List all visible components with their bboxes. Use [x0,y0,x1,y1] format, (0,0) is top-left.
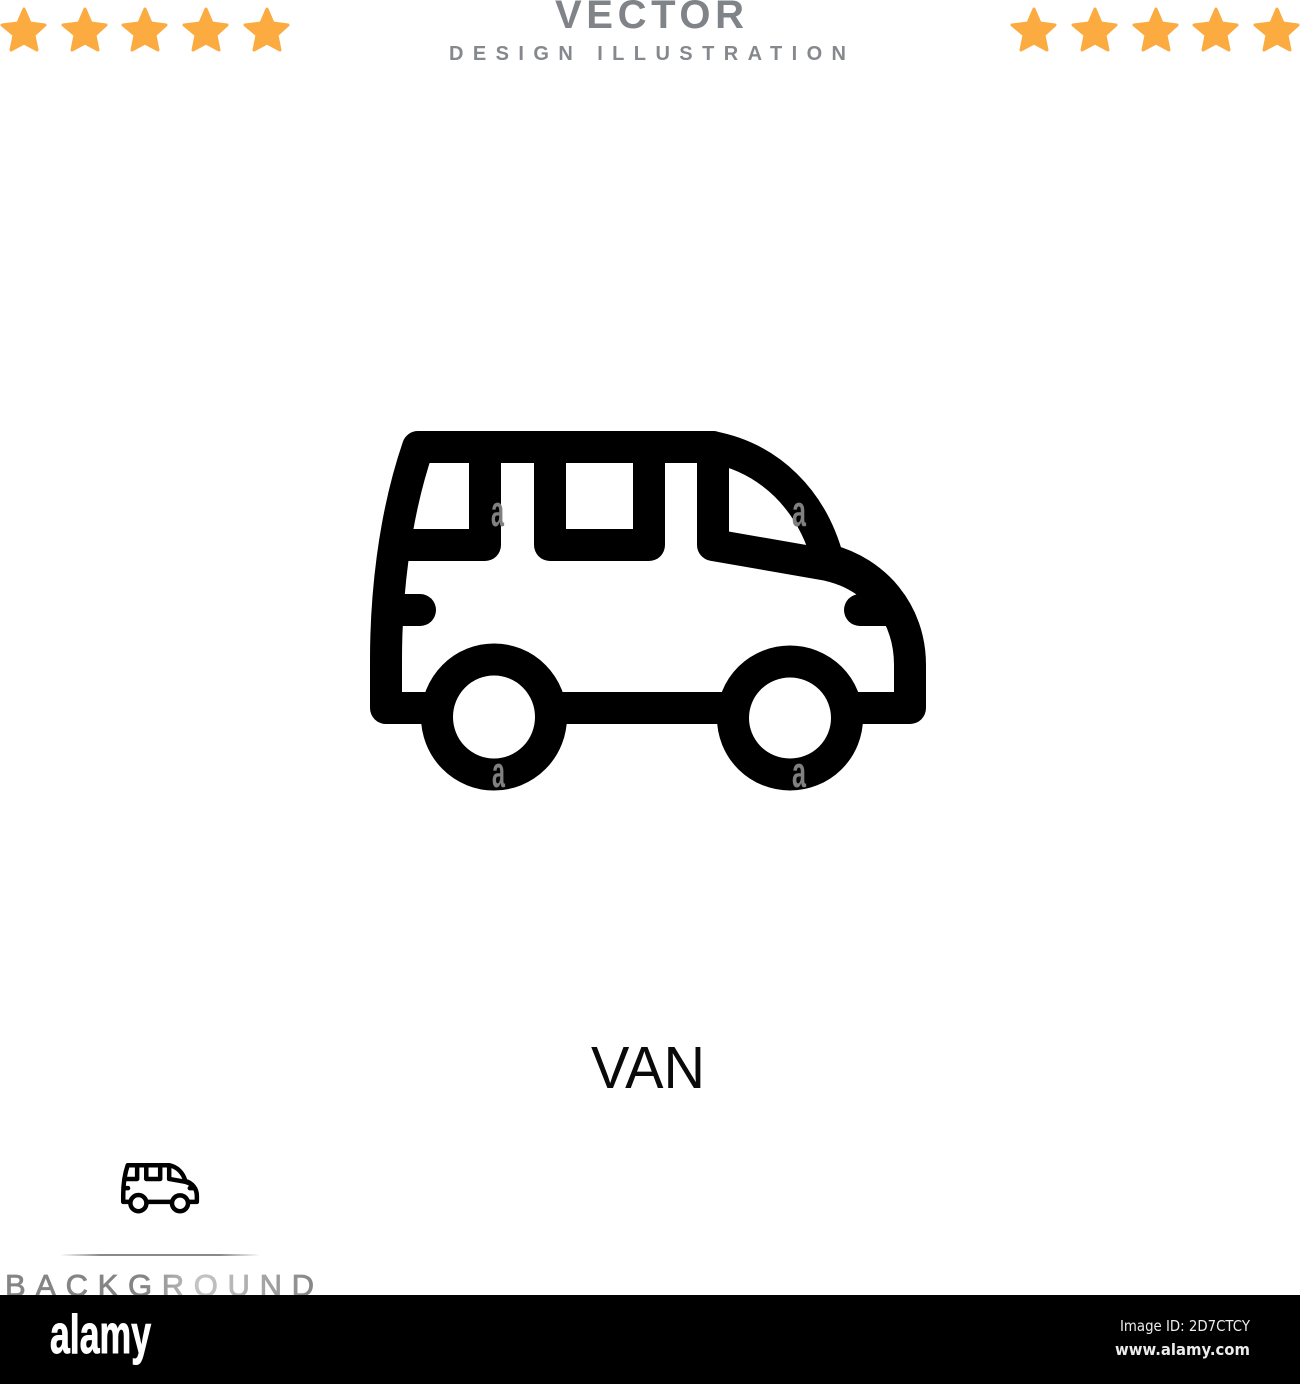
rear window frame [402,447,485,545]
watermark letters: a [491,487,504,536]
watermark letters: a [792,487,806,536]
footer bar [0,1295,1300,1384]
icon: large van [386,447,910,774]
watermark letters: a [792,748,806,797]
rear wheel [437,660,551,774]
logo: alamy: alamy [50,1303,151,1365]
title: van: VAN [591,1035,705,1101]
website url: www.alamy.com [1115,1340,1250,1359]
subheading: design illustration: DESIGN ILLUSTRATION [449,43,846,65]
image id: Image ID: 2D7CTCY [1120,1317,1251,1335]
left star rating [2,9,288,50]
watermark letters: a [492,748,505,797]
van body outline [386,447,910,708]
rear handle [402,594,420,626]
watermark letters [491,487,806,797]
front handle [860,594,885,626]
middle window frame [550,447,649,545]
front wheel [733,662,847,774]
label: background: BACKGROUND [5,1268,314,1303]
front window frame and hood line [713,447,872,586]
divider line [60,1254,260,1256]
icon: small van [123,1165,197,1211]
right star rating [1012,9,1298,50]
